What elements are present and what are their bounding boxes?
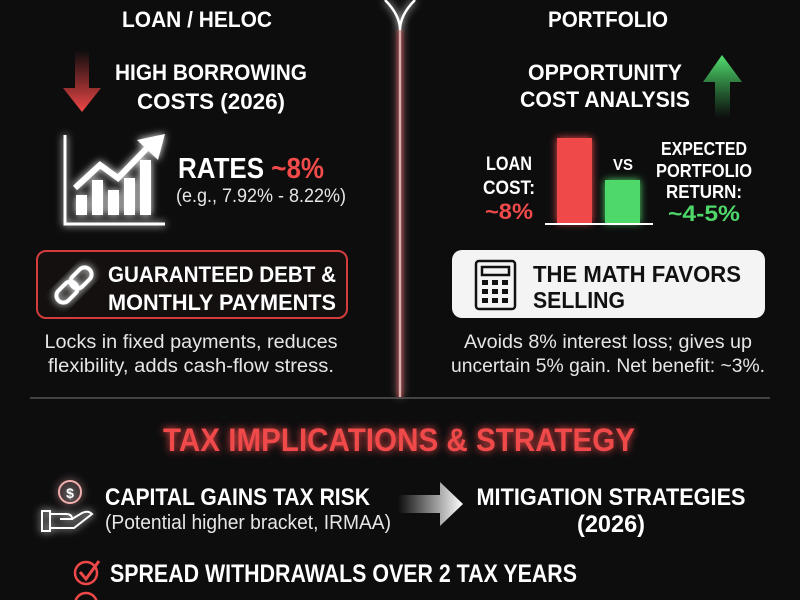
heading: high borrowing costs: HIGH BORROWING	[115, 60, 307, 85]
bar chart: loan vs portfolio	[483, 138, 752, 226]
heading: portfolio: PORTFOLIO	[548, 7, 668, 32]
right panel: portfolio	[451, 7, 765, 377]
left panel: loan / heloc: (e.g., 7.92% - 8.22%)	[176, 186, 346, 207]
icon: chain	[53, 264, 95, 306]
icon: rising chart	[65, 134, 165, 224]
heading: loan / heloc: LOAN / HELOC	[122, 7, 272, 32]
text: mitigation strategies: MITIGATION STRATEGIES	[476, 484, 746, 511]
callout: guaranteed debt: GUARANTEED DEBT &	[108, 262, 336, 287]
section: tax implications: (2026)	[577, 511, 645, 538]
list item: spread withdrawals: SPREAD WITHDRAWALS OVER 2 TAX YEARS	[110, 560, 577, 588]
left panel: loan / heloc	[37, 7, 347, 377]
text: locks in description: Locks in fixed payments, reduces	[44, 332, 338, 353]
bar chart: loan vs portfolio: ~4-5%	[668, 201, 740, 226]
bar chart: loan vs portfolio: PORTFOLIO	[656, 161, 752, 181]
icon: red down arrow	[63, 50, 101, 112]
icon: green up arrow	[703, 55, 742, 118]
callout: guaranteed debt: MONTHLY PAYMENTS	[108, 290, 336, 315]
arrow: to mitigation	[398, 482, 463, 526]
bar chart: loan vs portfolio: LOAN	[486, 154, 532, 175]
callout: guaranteed debt	[37, 251, 347, 318]
heading: opportunity cost: OPPORTUNITY	[528, 60, 682, 85]
callout: math favors selling	[452, 250, 765, 318]
callout: math favors selling: THE MATH FAVORS	[533, 261, 741, 287]
center divider line	[385, 0, 415, 397]
icon: hand with dollar coin	[42, 481, 92, 531]
bar chart: loan vs portfolio: RETURN:	[666, 182, 742, 202]
right panel: portfolio: uncertain 5% gain. Net benefit: ~3%.	[451, 356, 765, 377]
section: tax implications: (Potential higher bracket, IRMAA)	[105, 512, 391, 534]
text: capital gains tax risk: CAPITAL GAINS TAX RISK	[105, 484, 371, 511]
rates text: RATES ~8%	[178, 153, 324, 185]
right panel: portfolio: COST ANALYSIS	[520, 87, 690, 112]
icon: calculator	[476, 261, 515, 309]
bar chart: loan vs portfolio: VS	[613, 157, 633, 174]
heading: tax implications & strategy: TAX IMPLICATIONS & STRATEGY	[163, 422, 635, 458]
text: avoids description: Avoids 8% interest loss; gives up	[464, 332, 752, 353]
left panel: loan / heloc: flexibility, adds cash-flow stress.	[48, 356, 334, 377]
list item: partial next	[75, 593, 97, 600]
icon: hand with dollar coin: $	[66, 485, 74, 501]
bar chart: loan vs portfolio: COST:	[483, 178, 535, 199]
bar chart: loan vs portfolio: ~8%	[485, 199, 533, 224]
section: tax implications	[42, 422, 746, 600]
callout: math favors selling: SELLING	[533, 287, 625, 313]
bar chart: loan vs portfolio: EXPECTED	[661, 139, 747, 159]
left panel: loan / heloc: COSTS (2026)	[137, 89, 285, 114]
